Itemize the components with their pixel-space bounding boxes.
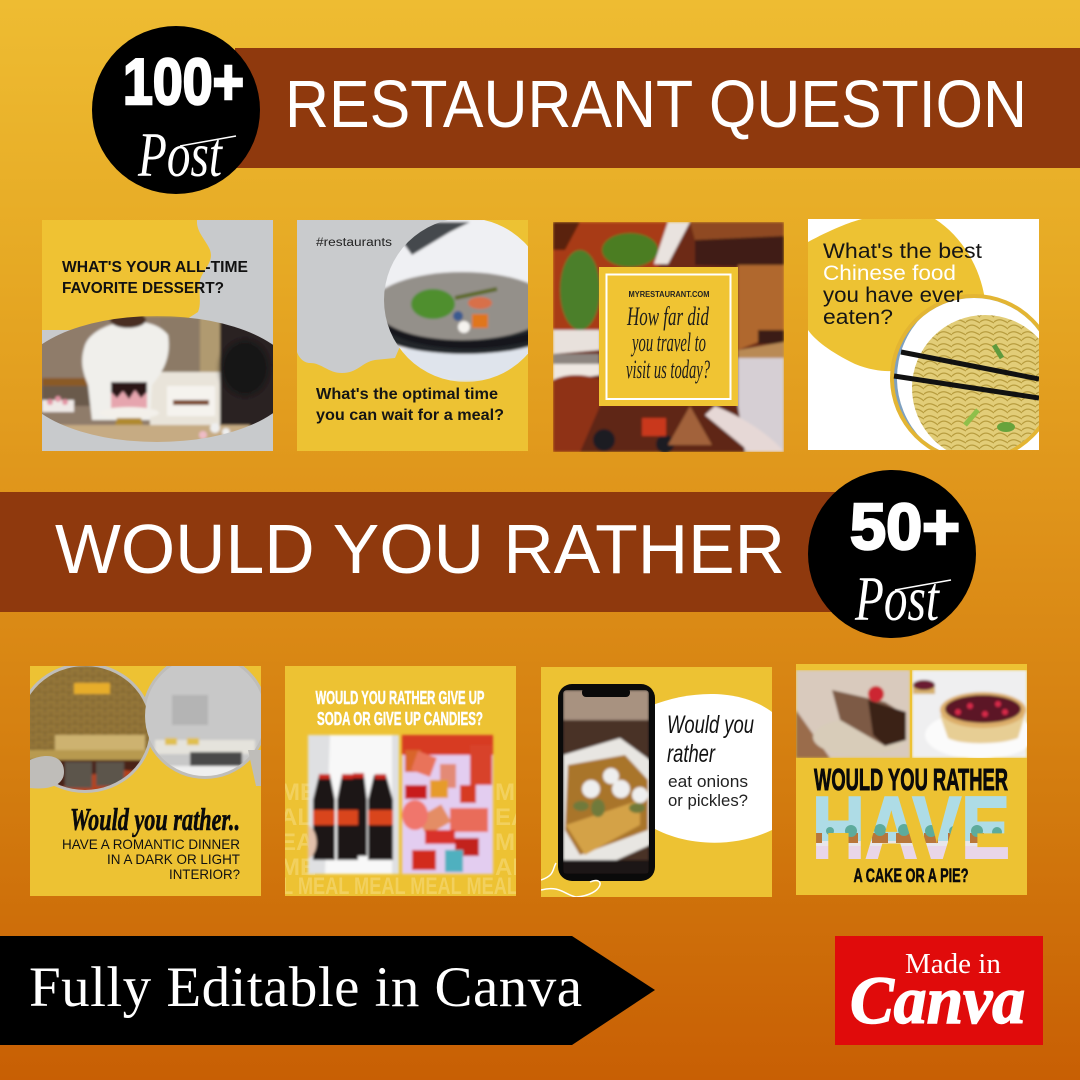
card: optimal wait time: you can wait for a meal? <box>316 407 504 424</box>
badge: 100+ post: Post <box>137 119 224 190</box>
quote box <box>599 267 738 406</box>
watermark: meal pattern: ME <box>280 779 316 806</box>
watermark: meal pattern <box>285 784 516 894</box>
watermark: meal pattern: EA <box>495 804 528 831</box>
card text: would you rather script: Would you rather.. <box>70 801 240 837</box>
photo: dark interior <box>20 666 150 792</box>
card text: chinese food question: eaten? <box>823 306 893 329</box>
card: favorite dessert: FAVORITE DESSERT? <box>62 280 224 297</box>
watermark: meal pattern: ME <box>495 779 531 806</box>
card: soda or candies <box>280 666 531 900</box>
top banner: restaurant question <box>235 48 1080 168</box>
logo: made in canva: Made in <box>905 948 1001 980</box>
quote box: MYRESTAURANT.COM <box>628 290 710 299</box>
logo: made in canva <box>835 936 1043 1045</box>
banner title: restaurant question: RESTAURANT QUESTION <box>285 67 1027 142</box>
chopsticks <box>894 352 1039 398</box>
card text: dessert question: WHAT'S YOUR ALL-TIME <box>62 259 248 276</box>
watermark: meal pattern: ME <box>280 854 316 881</box>
photo: light interior <box>145 666 261 776</box>
card text: dinner question: INTERIOR? <box>169 866 240 882</box>
card text: dinner question: IN A DARK OR LIGHT <box>107 851 240 867</box>
watermark: meal pattern: EA <box>280 829 313 856</box>
card text: dinner question: HAVE A ROMANTIC DINNER <box>62 836 240 852</box>
card text: have: HAVE <box>812 778 1010 877</box>
card text: chinese food question: you have ever <box>823 284 963 307</box>
banner title: would you rather: WOULD YOU RATHER <box>55 510 785 588</box>
card text: onions question: eat onions <box>668 772 748 791</box>
badge: 50+ post: 50+ <box>850 490 960 563</box>
photo: chef decorating a cake <box>42 316 273 442</box>
card text: hashtag: #restaurants <box>316 237 392 249</box>
card text: dinner question <box>63 840 240 879</box>
arrow banner: fully editable in canva: Fully Editable in Canva <box>29 956 582 1019</box>
quote box: you travel to <box>630 328 706 357</box>
watermark: meal pattern: ME <box>495 829 531 856</box>
quote box: How far did <box>626 302 710 331</box>
middle banner: would you rather <box>0 492 850 612</box>
card text: chinese food question <box>823 240 982 329</box>
photo: food dishes <box>553 222 784 453</box>
card text: chinese food question: What's the best <box>823 240 982 263</box>
card text: onions question: or pickles? <box>668 791 748 810</box>
badge: 50+ post <box>808 470 976 638</box>
card text: soda question: WOULD YOU RATHER GIVE UP <box>316 688 484 708</box>
card text: script heading: Would you <box>667 711 754 739</box>
logo: made in canva: Canva <box>850 962 1025 1038</box>
arrow banner: fully editable in canva <box>0 936 655 1045</box>
photo: cola bottles <box>308 735 399 874</box>
card text: chinese food question: Chinese food <box>823 262 956 285</box>
photo: plated dish <box>384 220 528 382</box>
card: how far did you travel <box>553 222 784 453</box>
card: favorite dessert <box>42 220 273 451</box>
phone with food photo <box>558 684 655 881</box>
card: onions or pickles <box>541 667 772 897</box>
card text: wait question: What's the optimal time <box>316 386 498 403</box>
photo: gummy candies <box>402 735 493 874</box>
card text: onions question <box>668 775 748 810</box>
quote box: visit us today? <box>626 355 710 384</box>
card: optimal wait time <box>297 220 528 451</box>
card: cake or pie <box>796 664 1035 895</box>
badge: 100+ post: 100+ <box>123 45 244 118</box>
badge: 100+ post <box>92 26 260 194</box>
card: soda or candies: SODA OR GIVE UP CANDIES? <box>317 709 483 729</box>
card text: script heading: rather <box>667 740 716 768</box>
photo: chocolate cake <box>796 670 910 758</box>
badge: 50+ post: Post <box>854 563 941 634</box>
card: best chinese food <box>808 219 1039 450</box>
watermark: meal pattern: AL <box>280 804 312 831</box>
watermark: meal pattern: L MEAL MEAL MEAL MEAL <box>282 873 518 900</box>
photo: berry tart <box>912 670 1035 759</box>
card text: a cake or a pie: A CAKE OR A PIE? <box>854 866 968 887</box>
photo: noodles with chopsticks <box>894 298 1039 450</box>
card text: script heading <box>667 715 754 762</box>
watermark: meal pattern: AL <box>495 854 527 881</box>
card: romantic dinner <box>30 666 261 896</box>
